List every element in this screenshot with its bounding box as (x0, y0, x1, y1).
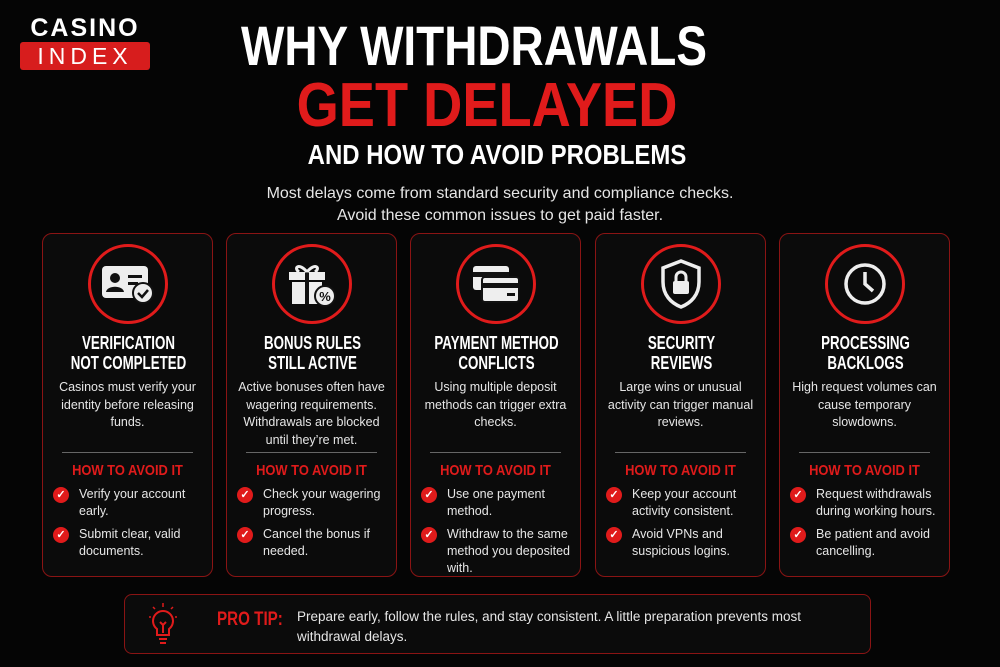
panel: bonus: Cancel the bonus if needed. (263, 527, 370, 558)
panel: security: HOW TO AVOID IT (625, 462, 736, 479)
subtitle (267, 185, 733, 224)
subtitle: Avoid these common issues to get paid faster. (337, 207, 663, 224)
panel: verification: Submit clear, valid documents. (79, 527, 180, 558)
panel: backlogs: High request volumes can cause temporary slowdowns. (792, 380, 937, 429)
panel: bonus: HOW TO AVOID IT (256, 462, 367, 479)
panel: security: Avoid VPNs and suspicious logins. (632, 527, 730, 558)
title (241, 14, 707, 170)
panel: payment: PAYMENT METHOD (434, 333, 559, 353)
panel: security: SECURITY (648, 333, 715, 353)
icon: ID card (88, 244, 168, 324)
panel: verification: HOW TO AVOID IT (72, 462, 183, 479)
panel: payment: Withdraw to the same method you deposited with. (447, 527, 570, 575)
panel: payment (410, 233, 581, 577)
panel: bonus: STILL ACTIVE (268, 353, 357, 373)
panel: verification: VERIFICATION (82, 333, 175, 353)
icon: gift: % (319, 289, 331, 304)
panel: payment: Use one payment method. (447, 487, 545, 518)
panel: verification: NOT COMPLETED (71, 353, 186, 373)
panel: bonus: BONUS RULES (264, 333, 361, 353)
icon: cards (456, 244, 536, 324)
subtitle: Most delays come from standard security and compliance checks. (267, 185, 733, 202)
panel: payment: CONFLICTS (458, 353, 535, 373)
callout: pro tip: Prepare early, follow the rules, and stay consistent. A little preparation prevents most withdrawal delays. (297, 609, 801, 644)
panel: security: Large wins or unusual activity can trigger manual reviews. (608, 380, 753, 429)
panel: bonus: Check your wagering progress. (263, 487, 380, 518)
panel: security (595, 233, 766, 577)
panel: security: Keep your account activity consistent. (632, 487, 736, 518)
callout: pro tip (124, 594, 871, 654)
panel: verification: Casinos must verify your identity before releasing funds. (59, 380, 196, 429)
logo (20, 14, 150, 70)
logo: INDEX (37, 43, 133, 69)
panel: backlogs: HOW TO AVOID IT (809, 462, 920, 479)
title: AND HOW TO AVOID PROBLEMS (308, 139, 686, 170)
panel: security: REVIEWS (651, 353, 712, 373)
panel: verification (42, 233, 213, 577)
panel: bonus: Active bonuses often have wagering requirements. Withdrawals are blocked until they’re met. (238, 380, 385, 446)
panel: backlogs: BACKLOGS (827, 353, 904, 373)
panel: verification: Verify your account early. (79, 487, 185, 518)
panel: backlogs (779, 233, 950, 577)
logo: CASINO (30, 14, 140, 42)
panel: bonus (226, 233, 397, 577)
icon: gift (272, 244, 352, 324)
panel: backlogs: PROCESSING (821, 333, 910, 353)
panel: backlogs: Request withdrawals during working hours. (816, 487, 936, 518)
panel: payment: Using multiple deposit methods can trigger extra checks. (425, 380, 566, 429)
callout: pro tip: PRO TIP: (217, 609, 283, 630)
icon: lightbulb (149, 603, 177, 644)
title: GET DELAYED (297, 71, 677, 140)
title: WHY WITHDRAWALS (241, 14, 707, 77)
icon: clock (825, 244, 905, 324)
panel: backlogs: Be patient and avoid cancelling. (816, 527, 930, 558)
icon: shield (641, 244, 721, 324)
panel: payment: HOW TO AVOID IT (440, 462, 551, 479)
